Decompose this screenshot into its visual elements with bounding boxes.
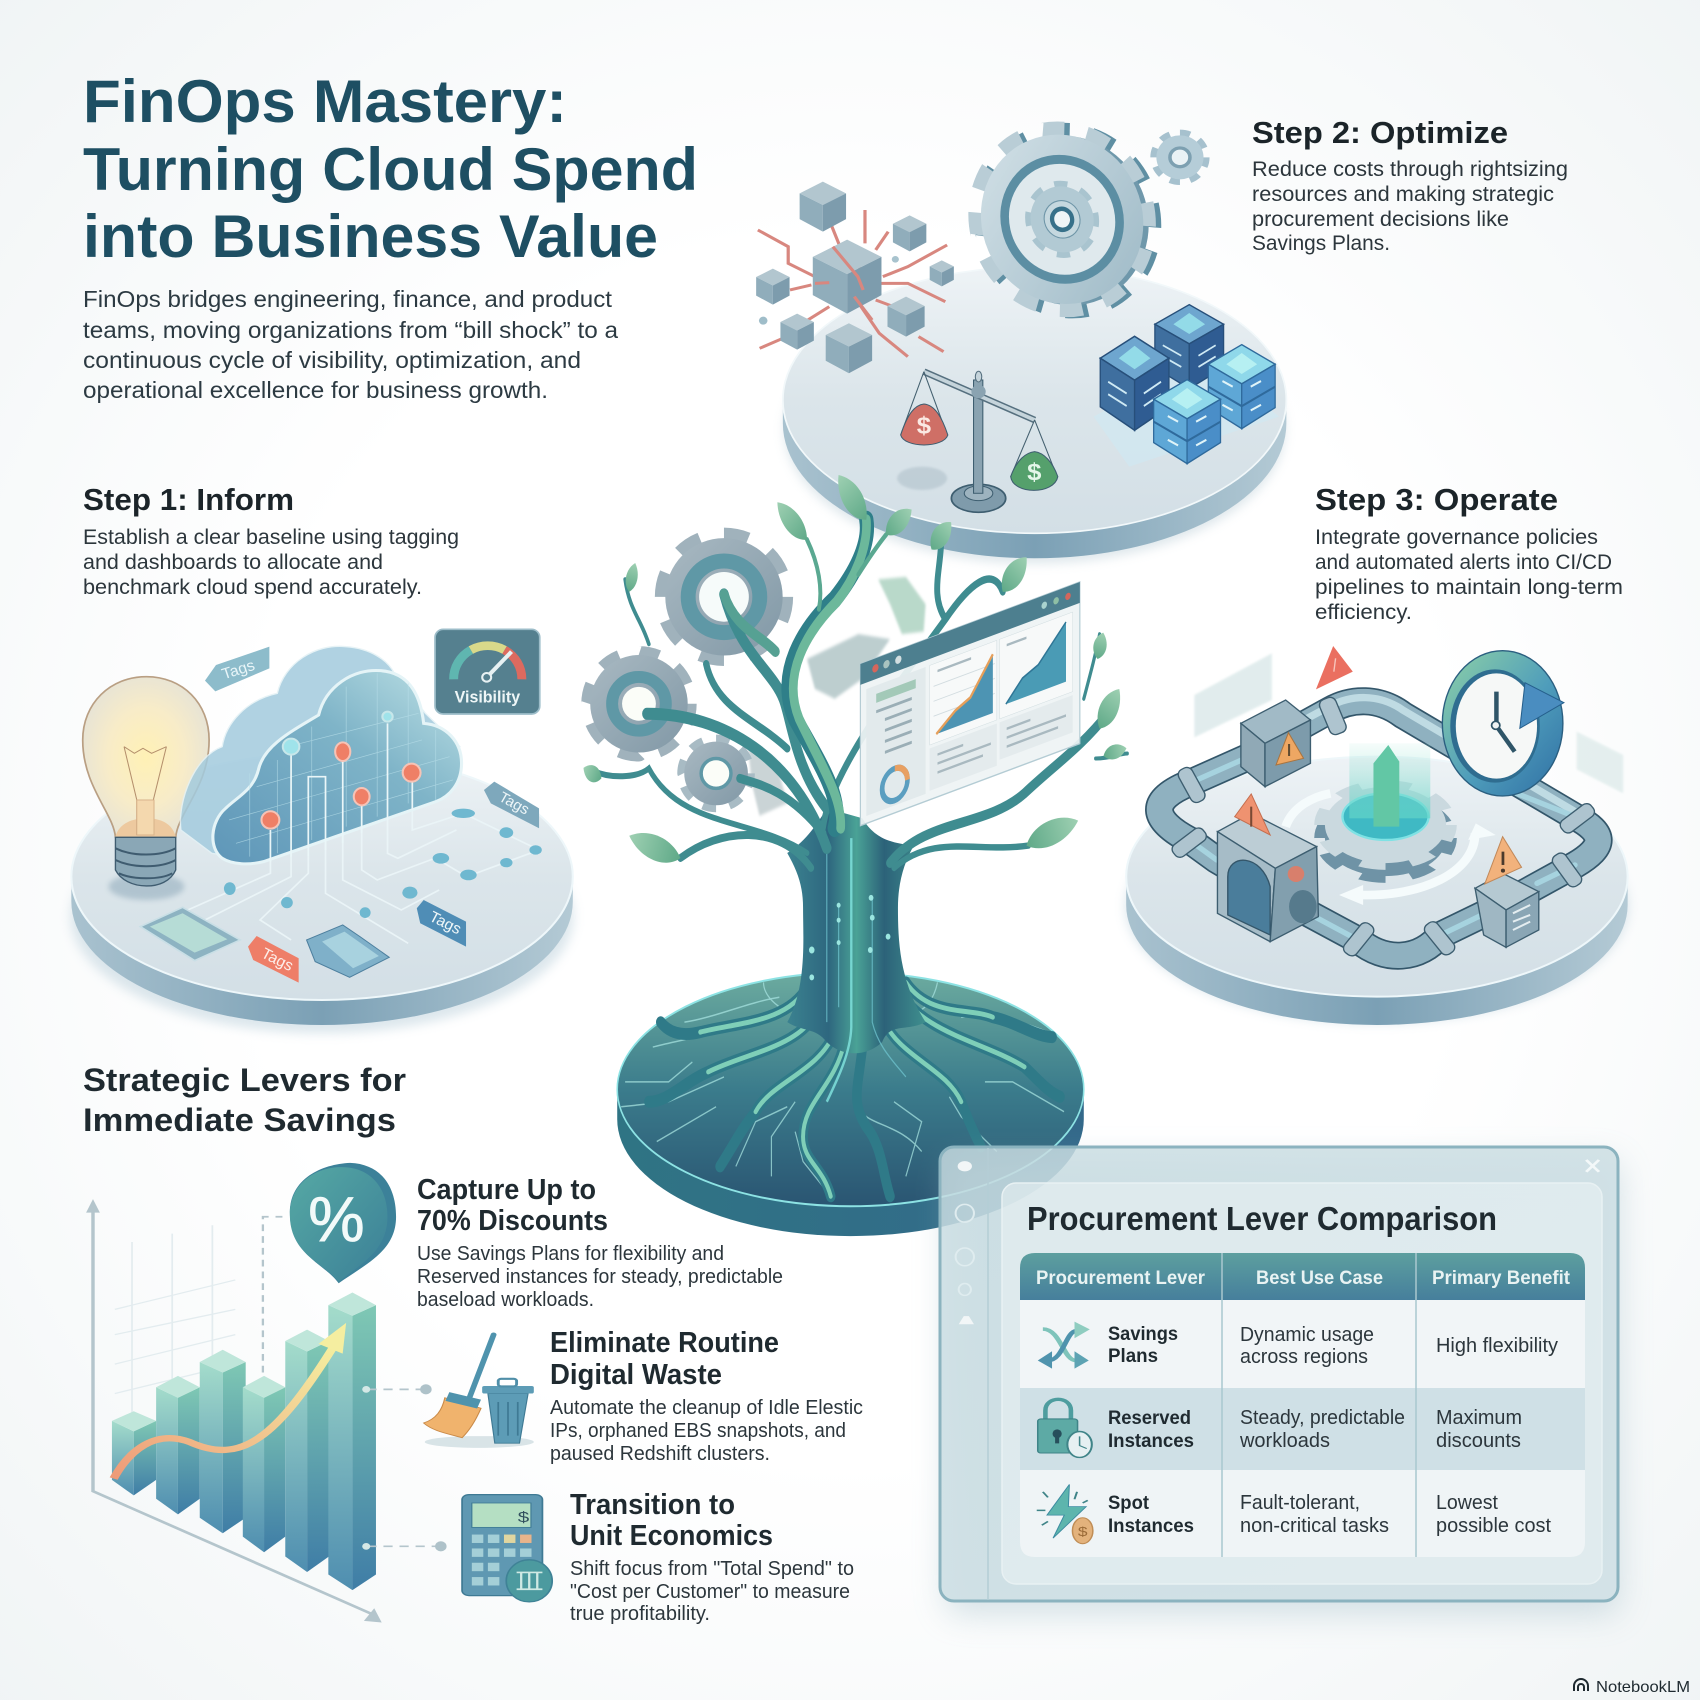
lever 3 text: "Cost per Customer" to measure xyxy=(570,1581,850,1603)
row: spot instances: possible cost xyxy=(1436,1515,1551,1537)
lever 3 text xyxy=(570,1489,854,1625)
step 1 text: Step 1: Inform xyxy=(83,482,294,517)
row: reserved instances: discounts xyxy=(1436,1430,1521,1452)
icon: large gear xyxy=(962,117,1168,323)
growth bar chart with icons xyxy=(86,1163,552,1623)
lever 3 text: Transition to xyxy=(570,1489,735,1521)
icon: top gateway box xyxy=(1241,700,1310,787)
tags labels: Tags xyxy=(220,657,257,683)
row: savings plans: Dynamic usage xyxy=(1240,1324,1374,1346)
strategic levers heading xyxy=(83,1062,406,1138)
dashboard window xyxy=(860,582,1080,826)
step 2 text: Reduce costs through rightsizing xyxy=(1252,158,1568,181)
table header xyxy=(1036,1268,1571,1289)
faded background foliage xyxy=(748,577,926,816)
icon: tablet and chip xyxy=(140,907,389,977)
vertical dashed connector xyxy=(263,1217,282,1373)
tags labels: Tags xyxy=(426,909,464,938)
row: spot instances: Fault-tolerant, xyxy=(1240,1492,1360,1514)
icon: balance scale: $ xyxy=(1027,459,1042,486)
icon: calculator xyxy=(462,1495,552,1602)
row: reserved instances: Reserved xyxy=(1108,1408,1191,1429)
icon: server stacks xyxy=(1094,305,1279,467)
comparison table xyxy=(1020,1253,1585,1557)
pipeline xyxy=(1159,698,1598,956)
gear: small xyxy=(683,741,749,806)
central tree on circuit platform xyxy=(581,468,1128,1236)
step 3 text: Integrate governance policies xyxy=(1315,526,1598,549)
step 2 platform: optimize xyxy=(756,117,1286,563)
leaves xyxy=(581,468,1128,870)
icon: lightning bolt with coin: $ xyxy=(1078,1525,1088,1539)
icon: lightning bolt with coin xyxy=(1037,1484,1093,1544)
lever 3 text: true profitability. xyxy=(570,1603,710,1625)
step 2 text: Step 2: Optimize xyxy=(1252,115,1508,150)
circuit lines xyxy=(188,723,539,943)
row: spot instances xyxy=(1108,1492,1551,1537)
inner panel xyxy=(1002,1183,1602,1584)
lever 2 text: Eliminate Routine xyxy=(550,1327,779,1359)
lever 1 text: Use Savings Plans for flexibility and xyxy=(417,1243,724,1265)
lever 1 text: Reserved instances for steady, predictable xyxy=(417,1266,783,1288)
NotebookLM watermark: NotebookLM xyxy=(1596,1679,1690,1696)
step 2 text: procurement decisions like xyxy=(1252,208,1509,231)
step 2 text: resources and making strategic xyxy=(1252,183,1554,206)
icon: visibility gauge xyxy=(435,629,540,714)
tags labels: Tags xyxy=(258,945,296,975)
tags labels: Tags xyxy=(496,790,532,818)
floating notes xyxy=(1194,653,1623,793)
window sidebar icons xyxy=(956,1160,1599,1324)
row: spot instances: non-critical tasks xyxy=(1240,1515,1389,1537)
icon: tangled resource cubes xyxy=(756,182,954,373)
icon: light bulb xyxy=(83,677,209,900)
step 2 text xyxy=(1252,115,1568,255)
icon: calculator: $ xyxy=(518,1509,529,1525)
row: reserved instances: Instances xyxy=(1108,1431,1194,1452)
intro paragraph xyxy=(83,286,618,403)
icon: small gear xyxy=(1155,134,1205,181)
step 3 text: Step 3: Operate xyxy=(1315,482,1558,517)
icon: balance scale: $ xyxy=(917,412,931,439)
intro paragraph: continuous cycle of visibility, optimization, and xyxy=(83,347,581,373)
lever 2 text: Digital Waste xyxy=(550,1359,722,1391)
lever 2 text: paused Redshift clusters. xyxy=(550,1443,770,1465)
lever 1 text: baseload workloads. xyxy=(417,1289,594,1311)
icon: percent bubble: % xyxy=(308,1184,364,1255)
panel: procurement lever comparison xyxy=(940,1147,1620,1615)
trunk xyxy=(787,808,926,1102)
row: spot instances: Lowest xyxy=(1436,1492,1498,1514)
step 1 platform: inform xyxy=(71,629,573,1033)
tags labels xyxy=(205,647,539,983)
step 3 text: and automated alerts into CI/CD xyxy=(1315,551,1612,574)
trend arrow xyxy=(114,1323,346,1479)
row: savings plans: Savings xyxy=(1108,1324,1178,1345)
strategic levers heading: Immediate Savings xyxy=(83,1102,396,1138)
branches xyxy=(593,520,1127,868)
icon: padlock with clock xyxy=(1038,1399,1092,1457)
curved arrows xyxy=(1286,793,1475,895)
row: spot instances: Spot xyxy=(1108,1493,1150,1514)
icon: tunnel gate xyxy=(1217,794,1318,942)
row: reserved instances: Steady, predictable xyxy=(1240,1407,1405,1429)
lever 2 text: Automate the cleanup of Idle Elestic xyxy=(550,1397,863,1419)
intro paragraph: operational excellence for business growth. xyxy=(83,377,548,403)
row: spot instances: Instances xyxy=(1108,1516,1194,1537)
step 3 text xyxy=(1315,482,1623,624)
lever 1 text: Capture Up to xyxy=(417,1174,596,1206)
row: savings plans: Plans xyxy=(1108,1346,1158,1367)
step 2 text: Savings Plans. xyxy=(1252,232,1390,255)
icon: central gear with growth arrow xyxy=(1325,743,1446,876)
icon: shuffle arrows xyxy=(1038,1322,1090,1369)
icon: balance scale xyxy=(897,371,1058,512)
chart axes xyxy=(86,1199,382,1623)
step 3 text: pipelines to maintain long-term xyxy=(1315,576,1623,599)
strategic levers heading: Strategic Levers for xyxy=(83,1062,406,1098)
row: savings plans: across regions xyxy=(1240,1346,1368,1368)
step 1 text xyxy=(83,482,459,599)
row: reserved instances: workloads xyxy=(1239,1430,1330,1452)
intro paragraph: teams, moving organizations from “bill shock” to a xyxy=(83,317,618,343)
step 1 text: and dashboards to allocate and xyxy=(83,551,383,574)
title: into Business Value xyxy=(83,203,658,270)
icon: lower junction box xyxy=(1475,837,1539,947)
icon: cloud xyxy=(180,646,462,864)
pipe couplings xyxy=(1170,696,1597,958)
lever 3 text: Shift focus from "Total Spend" to xyxy=(570,1558,854,1580)
tree platform xyxy=(617,972,1084,1236)
icon: percent bubble xyxy=(290,1163,396,1283)
icon: clock with cycle arrow xyxy=(1442,651,1564,796)
lever 2 text xyxy=(550,1327,863,1465)
step 1 text: Establish a clear baseline using tagging xyxy=(83,526,459,549)
step 1 text: benchmark cloud spend accurately. xyxy=(83,576,422,599)
row: reserved instances: Maximum xyxy=(1436,1407,1522,1429)
row: reserved instances xyxy=(1108,1407,1522,1452)
lever 1 text: 70% Discounts xyxy=(417,1205,608,1237)
title: Turning Cloud Spend xyxy=(83,136,698,203)
tree roots xyxy=(649,982,1060,1196)
intro paragraph: FinOps bridges engineering, finance, and product xyxy=(83,286,613,312)
gear: large xyxy=(664,537,784,657)
thin circuit traces xyxy=(621,982,1064,1191)
step 3 text: efficiency. xyxy=(1315,601,1412,624)
icon: broom and trash can xyxy=(424,1335,534,1448)
title: FinOps Mastery: xyxy=(83,68,567,135)
panel title: Procurement Lever Comparison xyxy=(1027,1200,1497,1237)
icon: visibility gauge: Visibility xyxy=(455,688,521,706)
table header: Procurement Lever xyxy=(1036,1268,1206,1289)
alert triangle xyxy=(1316,646,1353,689)
horizontal dashed connectors xyxy=(362,1384,447,1551)
lever 3 text: Unit Economics xyxy=(570,1520,773,1552)
row: savings plans xyxy=(1108,1324,1558,1368)
chart grid xyxy=(115,1225,235,1427)
bars xyxy=(112,1293,376,1590)
title xyxy=(83,68,698,270)
row: savings plans: High flexibility xyxy=(1436,1335,1558,1357)
lever 1 text xyxy=(417,1174,783,1311)
step 3 platform: operate xyxy=(1125,646,1628,1025)
gear: middle xyxy=(589,654,689,754)
table header: Best Use Case xyxy=(1256,1268,1383,1289)
lever 2 text: IPs, orphaned EBS snapshots, and xyxy=(550,1420,846,1442)
table header: Primary Benefit xyxy=(1432,1268,1571,1289)
